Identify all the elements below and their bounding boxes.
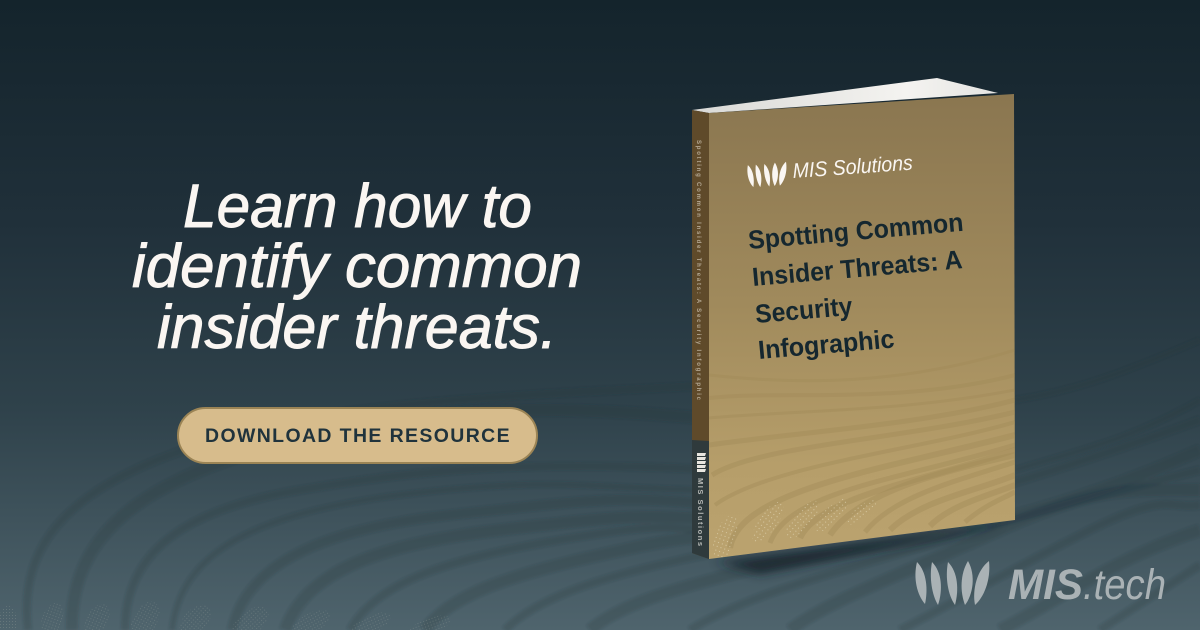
cover title: Security: [754, 291, 854, 329]
book shadow: [715, 524, 1005, 574]
spine title: Spotting Common Insider Threats: A Security Infographic: [695, 140, 701, 401]
book cover: [707, 94, 1015, 564]
button: download the resource: [178, 408, 537, 463]
book pages: [692, 78, 998, 113]
logo mark: [915, 561, 989, 605]
cover speckle: [713, 499, 876, 557]
cover logo: MIS Solutions: [792, 152, 914, 183]
logo wordmark: MIS.tech: [1008, 561, 1166, 609]
spine logo: MIS Solutions: [696, 478, 705, 546]
button: download the resource: DOWNLOAD THE RESOURCE: [205, 425, 511, 447]
cover title: Insider Threats: A: [751, 244, 964, 292]
book spine: [692, 110, 709, 559]
cover title: [747, 207, 965, 365]
background speckle: [0, 597, 453, 630]
headline: [132, 172, 582, 361]
cover logo: [747, 152, 914, 188]
cover title: Spotting Common: [747, 207, 965, 255]
headline: Learn how to: [183, 172, 532, 240]
spine logo: [696, 453, 706, 546]
book: [692, 78, 1015, 574]
brand logo: MIS.tech: [915, 561, 1166, 609]
headline: identify common: [132, 232, 582, 300]
background wave pattern: [27, 340, 1200, 630]
cover wave pattern: [711, 375, 1015, 548]
cover title: Infographic: [757, 324, 896, 365]
headline: insider threats.: [157, 293, 557, 361]
